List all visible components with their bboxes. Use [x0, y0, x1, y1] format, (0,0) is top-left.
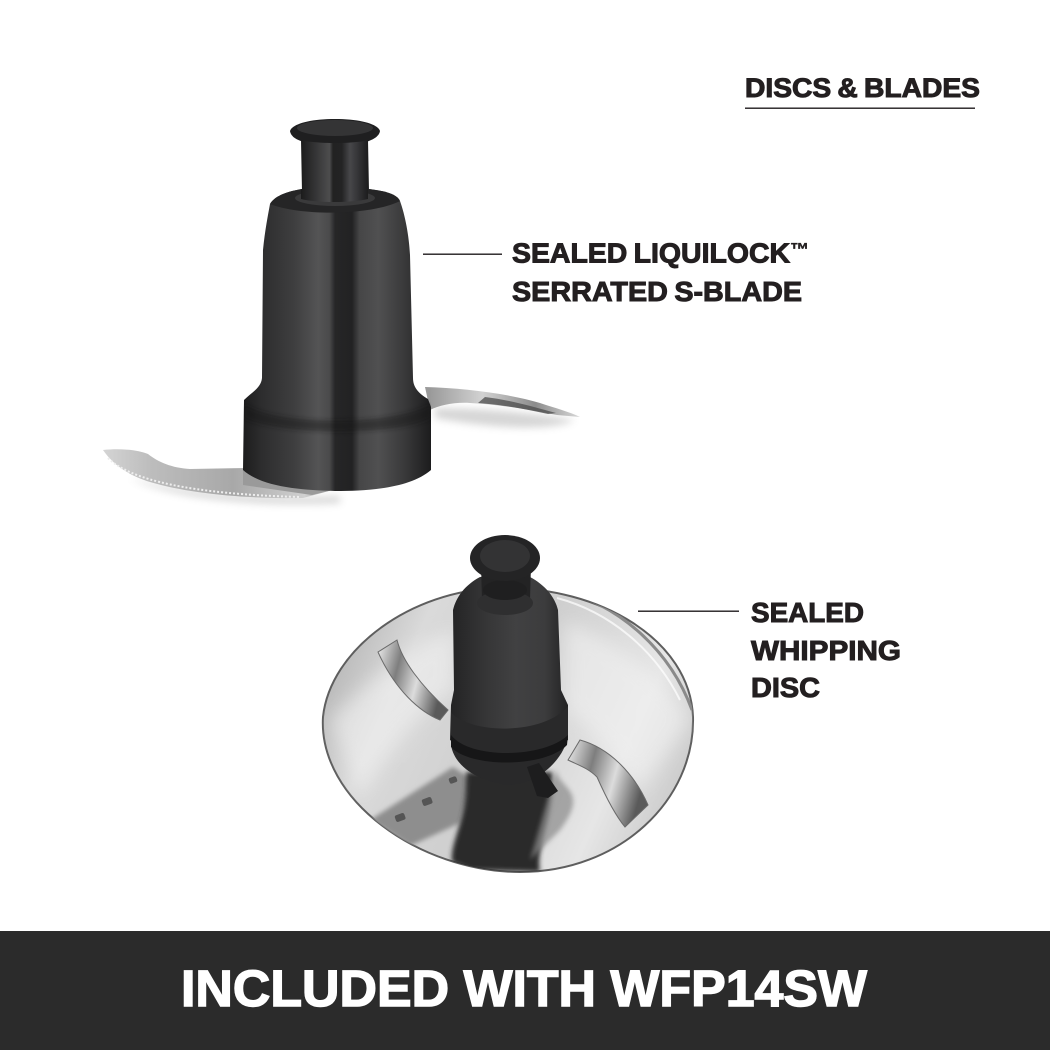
- label: whipping disc: [751, 597, 901, 703]
- disc plate: [323, 588, 693, 872]
- disc reflections: [330, 590, 692, 872]
- label: whipping disc: WHIPPING: [751, 635, 901, 666]
- body with base: [243, 189, 431, 491]
- label: S-blade: SEALED LIQUILOCK: [512, 238, 790, 268]
- base band shading: [244, 404, 431, 432]
- footer banner: [0, 931, 1050, 1050]
- collar: [451, 706, 568, 785]
- label: S-blade: [512, 238, 809, 307]
- right scoop: [568, 740, 648, 827]
- knob: [470, 535, 540, 581]
- right blade arm: [425, 387, 580, 417]
- label: whipping disc: DISC: [751, 672, 820, 703]
- footer banner: INCLUDED WITH WFP14SW: [181, 960, 868, 1017]
- tab: [527, 763, 558, 798]
- leader line: S-blade: [423, 254, 502, 255]
- cap: [290, 119, 380, 144]
- leader line: whipping disc: [638, 610, 739, 612]
- label: S-blade: ™: [790, 240, 809, 260]
- shoulder: [270, 189, 400, 213]
- blade shadow: [130, 408, 575, 504]
- left blade arm: [103, 449, 340, 498]
- label: whipping disc: SEALED: [751, 597, 864, 628]
- label: S-blade: SERRATED S-BLADE: [512, 276, 802, 307]
- heading: discs and blades: DISCS & BLADES: [745, 73, 980, 103]
- neck: [481, 565, 531, 609]
- left scoop: [378, 640, 448, 720]
- neck: [301, 140, 369, 192]
- product photo: sealed whipping disc: [323, 535, 693, 872]
- shaft: [450, 577, 568, 751]
- product photo: sealed S-blade: [103, 119, 580, 504]
